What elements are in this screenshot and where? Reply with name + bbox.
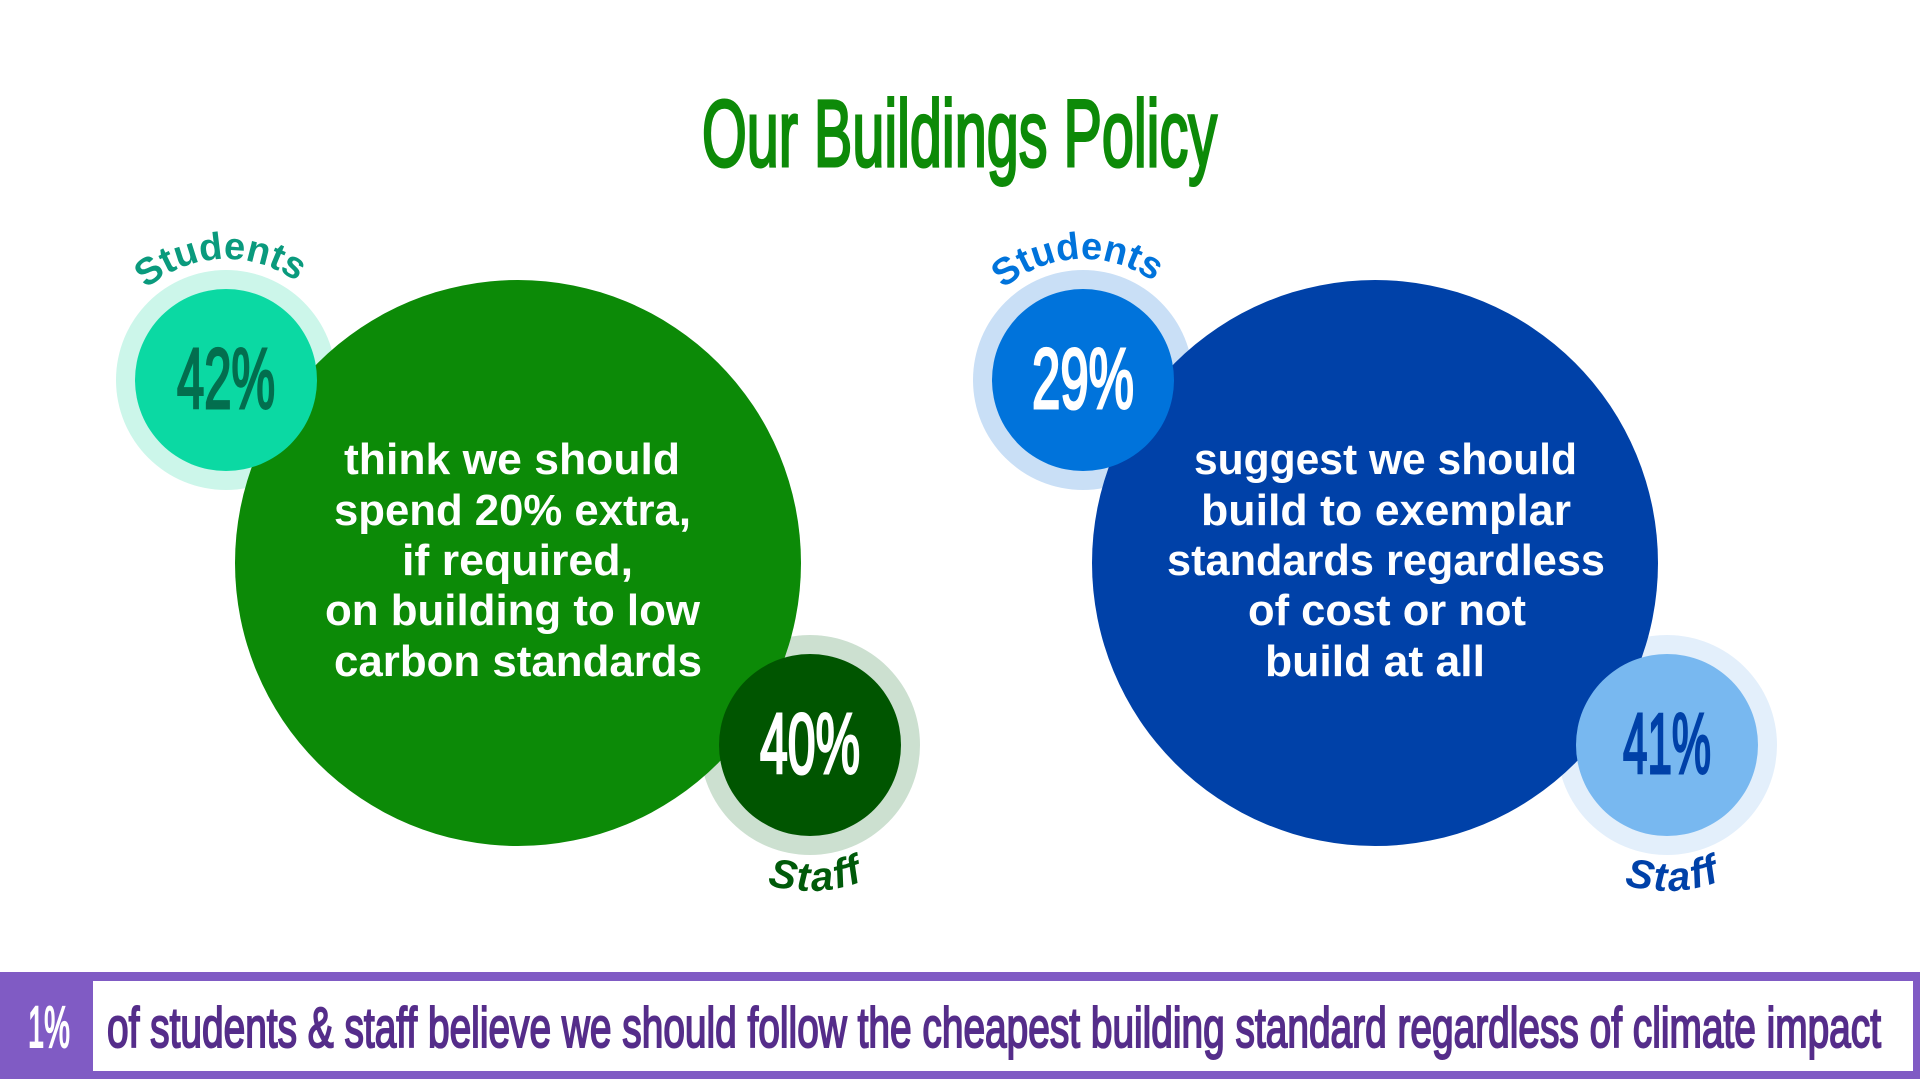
text block: blue statement: build at all [1265, 637, 1485, 686]
text block: green statement [325, 435, 702, 686]
ring: staff green [700, 635, 920, 855]
text block: green statement: carbon standards [334, 637, 702, 686]
main circle: blue [1092, 280, 1658, 846]
ring: students blue [973, 270, 1193, 490]
label: staff: Staff [1626, 852, 1716, 892]
text block: green statement: spend 20% extra, [334, 486, 691, 535]
label: students: Students [135, 231, 304, 285]
text block: green statement: on building to low [325, 586, 701, 635]
callout: bottom bar [0, 972, 1920, 1079]
text block: blue statement: suggest we should [1194, 435, 1577, 484]
text block: blue statement: build to exemplar [1201, 486, 1571, 535]
panel: exemplar standards [973, 231, 1777, 892]
badge: students 42%: 42% [177, 332, 275, 427]
badge: staff 41%: 41% [1623, 697, 1711, 792]
badge: students 42% [135, 289, 317, 471]
text block: green statement: think we should [344, 435, 680, 484]
text block: blue statement [1167, 435, 1605, 686]
badge: students 29% [992, 289, 1174, 471]
main circle: green [235, 280, 801, 846]
badge: staff 40% [719, 654, 901, 836]
badge: staff 40%: 40% [760, 697, 860, 792]
callout number: 1% [28, 995, 70, 1060]
title: Our Buildings Policy [702, 81, 1217, 187]
badge: staff 41% [1576, 654, 1758, 836]
panel: low carbon standards [116, 231, 920, 892]
ring: staff blue [1557, 635, 1777, 855]
text block: blue statement: of cost or not [1248, 586, 1526, 635]
label: staff: Staff [769, 852, 859, 892]
label: students: Students [992, 231, 1160, 285]
text block: green statement: if required, [402, 536, 633, 585]
text block: blue statement: standards regardless [1167, 536, 1605, 585]
badge: students 29%: 29% [1032, 332, 1134, 427]
ring: students green [116, 270, 336, 490]
